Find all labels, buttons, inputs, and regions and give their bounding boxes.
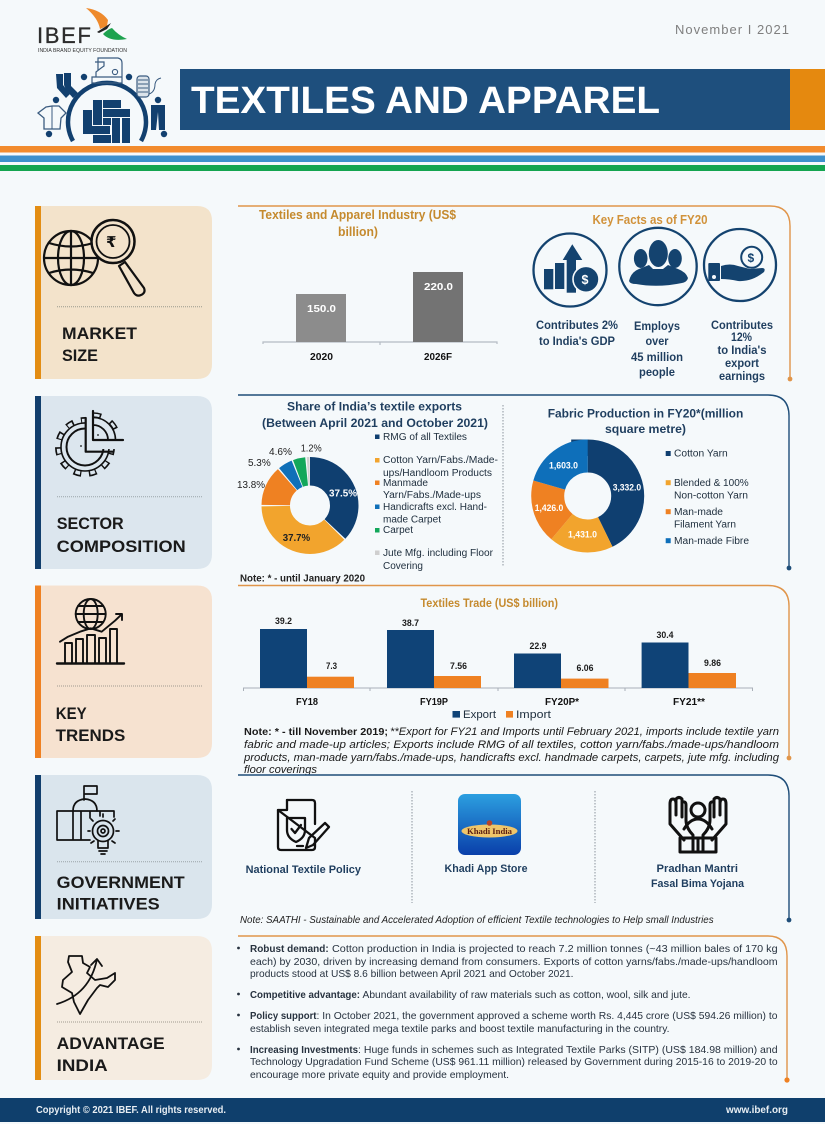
key facts: Contributes 2% — [536, 320, 618, 332]
panel: market size label — [35, 206, 212, 379]
icon: globe and magnifier: ₹ — [106, 233, 116, 251]
panel frame: key trends — [238, 586, 791, 760]
bar chart: textiles and apparel industry — [259, 208, 497, 363]
panel: advantage india label: INDIA — [57, 1057, 108, 1075]
bullets: advantage india: Cotton production in India is projected to reach 7.2 million tonnes (~43 million bales of 170 kg — [332, 943, 778, 955]
bar chart: textiles and apparel industry: billion) — [338, 225, 378, 239]
key facts: over — [646, 336, 669, 348]
icon: india map with arrow — [57, 956, 115, 1014]
key facts — [534, 213, 776, 383]
key facts: to India's — [718, 345, 766, 357]
panel frame: market size — [238, 206, 792, 381]
bullets: advantage india: each) by 2030, driven by increasing demand from consumers. Exports of cotton yarns/fabs./made-ups/handloom — [250, 956, 778, 968]
legend: exports: Yarn/Fabs./Made-ups — [383, 490, 481, 501]
logo: IBEF: IBEF — [37, 23, 91, 48]
logo: IBEF — [37, 8, 127, 54]
key facts: people — [639, 367, 675, 379]
donut chart: fabric production: 1,603.0 — [549, 461, 578, 471]
bar chart: textiles trade: 22.9 — [530, 641, 546, 652]
bar chart: textiles trade: 30.4 — [656, 630, 674, 641]
note: textiles trade: products, man-made yarn/fabs./made-ups, handicrafts excl. handmade carpets, carpets, jute mfg. including — [243, 752, 780, 764]
note: textiles trade: Note: * - till November 2019; — [244, 727, 388, 738]
donut chart: fabric production: 1,431.0 — [568, 530, 597, 540]
donut chart: share of textile exports: 37.5% — [329, 489, 357, 500]
donut chart: share of textile exports — [237, 400, 498, 572]
icon: hands protecting person — [670, 798, 726, 852]
legend: fabric: Non-cotton Yarn — [674, 491, 748, 502]
panel: market size label: MARKET — [62, 325, 137, 343]
donut chart: share of textile exports: 5.3% — [248, 458, 271, 469]
key facts: 45 million — [631, 352, 683, 364]
donut chart: share of textile exports: Share of India’s textile exports — [287, 400, 462, 414]
icon: people — [619, 228, 697, 305]
icon: hand with coin — [704, 229, 776, 301]
panel: key trends label — [35, 586, 212, 758]
initiative: national textile policy: National Textile Policy — [246, 864, 362, 876]
initiative: khadi app store: Khadi App Store — [444, 863, 528, 875]
bar chart: textiles and apparel industry: 2026F — [424, 352, 452, 363]
legend: exports — [375, 432, 498, 572]
logo: IBEF: INDIA BRAND EQUITY FOUNDATION — [38, 48, 127, 54]
donut chart: share of textile exports: 1.2% — [301, 444, 322, 455]
panel: key trends label: KEY — [56, 705, 87, 723]
bar chart: textiles trade: 7.3 — [326, 661, 337, 672]
bar chart: textiles trade: FY20P* — [545, 696, 580, 708]
icon: khadi app: Khadi India — [467, 827, 512, 836]
legend: exports: Carpet — [383, 525, 413, 536]
legend: trade: Import — [516, 709, 551, 721]
donut chart: fabric production: 1,426.0 — [535, 503, 563, 513]
key facts: Employs — [634, 321, 680, 333]
bar chart: textiles trade — [244, 598, 752, 721]
legend: exports: Jute Mfg. including Floor — [383, 548, 494, 559]
initiative: khadi app store — [444, 794, 528, 875]
panel: government initiatives label: INITIATIVES — [57, 896, 160, 914]
bar chart: textiles trade: 38.7 — [402, 618, 419, 629]
donut chart: fabric production — [535, 407, 749, 547]
bar chart: textiles trade: 39.2 — [275, 616, 292, 627]
icon: policy document — [278, 800, 329, 850]
initiative: pradhan mantri fasal bima yojana: Fasal Bima Yojana — [651, 878, 745, 890]
donut chart: share of textile exports: 13.8% — [237, 480, 265, 491]
bullets: advantage india: products stood at US$ 8.6 billion between April 2021 and October 2021. — [250, 968, 574, 980]
initiative: national textile policy — [246, 800, 362, 876]
bar chart: textiles and apparel industry: 2020 — [310, 352, 333, 363]
key facts: 12% — [731, 332, 752, 344]
legend: fabric: Man-made Fibre — [674, 536, 749, 547]
bar chart: textiles trade: 7.56 — [450, 661, 467, 672]
legend: trade — [452, 709, 551, 721]
legend: exports: made Carpet — [383, 515, 441, 526]
icon: government building and bulb — [57, 786, 119, 854]
title banner — [180, 69, 825, 130]
bar chart: textiles and apparel industry: Textiles and Apparel Industry (US$ — [259, 208, 456, 222]
bullets: advantage india: Robust demand: — [250, 943, 329, 955]
legend: fabric: Filament Yarn — [674, 520, 736, 531]
panel frame: sector composition — [238, 395, 791, 570]
bullets: advantage india: Technology Upgradation Fund Scheme (US$ 961.11 million) released by Government during 2015-16 to 2019-20 to — [250, 1056, 778, 1068]
panel: sector composition label — [35, 396, 212, 569]
icon: hand with coin: $ — [748, 251, 754, 265]
bullets: advantage india: Abundant availability of raw materials such as cotton, wool, silk and jute. — [362, 989, 690, 1001]
legend: fabric: Man-made — [674, 507, 723, 518]
note: textiles trade: floor coverings — [244, 764, 317, 776]
initiative: pradhan mantri fasal bima yojana: Pradhan Mantri — [656, 863, 738, 875]
header stripes — [0, 146, 825, 171]
legend: trade: Export — [463, 709, 496, 721]
footer — [0, 1098, 825, 1122]
icon: textile illustration — [38, 58, 167, 143]
icon: GDP growth: $ — [582, 273, 588, 287]
legend: fabric: Cotton Yarn — [674, 449, 728, 460]
panel: market size label: SIZE — [62, 347, 98, 365]
donut chart: fabric production: Fabric Production in FY20*(million — [548, 407, 743, 421]
bullets: advantage india: Policy support — [250, 1010, 317, 1022]
bar chart: textiles and apparel industry: 220.0 — [424, 281, 453, 293]
key facts: earnings — [719, 371, 765, 383]
icon: gear and pie — [58, 411, 123, 474]
bar chart: textiles and apparel industry: 150.0 — [307, 303, 336, 315]
donut chart: fabric production: 3,332.0 — [613, 483, 641, 493]
panel: key trends label: TRENDS — [56, 727, 125, 745]
legend: fabric — [666, 449, 749, 547]
legend: fabric: Blended & 100% — [674, 478, 749, 489]
note: SAATHI: Note: SAATHI - Sustainable and Accelerated Adoption of efficient Textile technologies to Help small Industries — [240, 915, 714, 926]
panel: government initiatives label: GOVERNMENT — [57, 874, 185, 892]
bar chart: textiles trade: FY18 — [296, 696, 318, 708]
note: textiles trade — [243, 726, 780, 776]
legend: exports: ups/Handloom Products — [383, 468, 492, 479]
bullets: advantage india: : Huge funds in schemes such as Integrated Textile Parks (SITP) (US$ 184.98 million) and — [358, 1044, 778, 1056]
note: until January 2020: Note: * - until January 2020 — [240, 574, 365, 585]
note: textiles trade: **Export for FY21 and Imports until February 2021, imports include textile yarn — [390, 726, 779, 738]
key facts: Key Facts as of FY20 — [592, 213, 708, 227]
icon: globe over chart — [57, 599, 124, 664]
icon: GDP growth — [534, 234, 606, 306]
panel: advantage india label — [35, 936, 212, 1080]
bullets: advantage india: Competitive advantage: — [250, 989, 360, 1001]
legend: exports: Manmade — [383, 478, 428, 489]
title banner: TEXTILES AND APPAREL — [191, 80, 660, 122]
bar chart: textiles trade: 6.06 — [576, 663, 594, 674]
panel: sector composition label: SECTOR — [57, 515, 124, 533]
bar chart: textiles trade: FY21** — [673, 696, 706, 708]
bullets: advantage india: establish seven integrated mega textile parks and boost textile manufacturing in the country. — [250, 1023, 670, 1035]
legend: exports: Handicrafts excl. Hand- — [383, 502, 487, 513]
footer: Copyright © 2021 IBEF. All rights reserved. — [36, 1104, 226, 1116]
footer: www.ibef.org — [725, 1104, 788, 1116]
panel frame: advantage india — [238, 936, 790, 1083]
note: textiles trade: fabric and made-up articles; Exports include RMG of all textiles, cotton yarn/fabs./made-ups/handloom — [244, 739, 779, 751]
bullets: advantage india — [237, 943, 778, 1081]
panel frame: government initiatives — [238, 775, 791, 922]
key facts: export — [725, 358, 759, 370]
bar chart: textiles trade: FY19P — [420, 696, 448, 708]
icon: globe and magnifier — [44, 220, 145, 296]
donut chart: fabric production: square metre) — [605, 422, 686, 436]
bullets: advantage india: Increasing Investments — [250, 1044, 358, 1056]
key facts: to India's GDP — [539, 336, 615, 348]
panel: advantage india label: ADVANTAGE — [57, 1035, 165, 1053]
donut chart: share of textile exports: (Between April 2021 and October 2021) — [262, 416, 488, 430]
initiative: pradhan mantri fasal bima yojana — [651, 798, 745, 890]
bar chart: textiles trade: Textiles Trade (US$ billion) — [420, 598, 558, 610]
date: November I 2021 — [675, 22, 789, 37]
legend: exports: Cotton Yarn/Fabs./Made- — [383, 455, 498, 466]
donut chart: share of textile exports: 37.7% — [283, 533, 310, 544]
panel: sector composition label: COMPOSITION — [57, 538, 186, 556]
donut chart: share of textile exports: 4.6% — [269, 447, 292, 458]
bullets: advantage india: : In October 2021, the government approved a scheme worth Rs. 4,445 crore (US$ 594.26 million) to — [316, 1010, 778, 1022]
key facts: Contributes — [711, 320, 773, 332]
bullets: advantage india: encourage more private equity and provide employment. — [250, 1069, 509, 1081]
legend: exports: RMG of all Textiles — [383, 432, 467, 443]
panel: government initiatives label — [35, 775, 212, 919]
legend: exports: Covering — [383, 561, 423, 572]
bar chart: textiles trade: 9.86 — [704, 658, 721, 669]
